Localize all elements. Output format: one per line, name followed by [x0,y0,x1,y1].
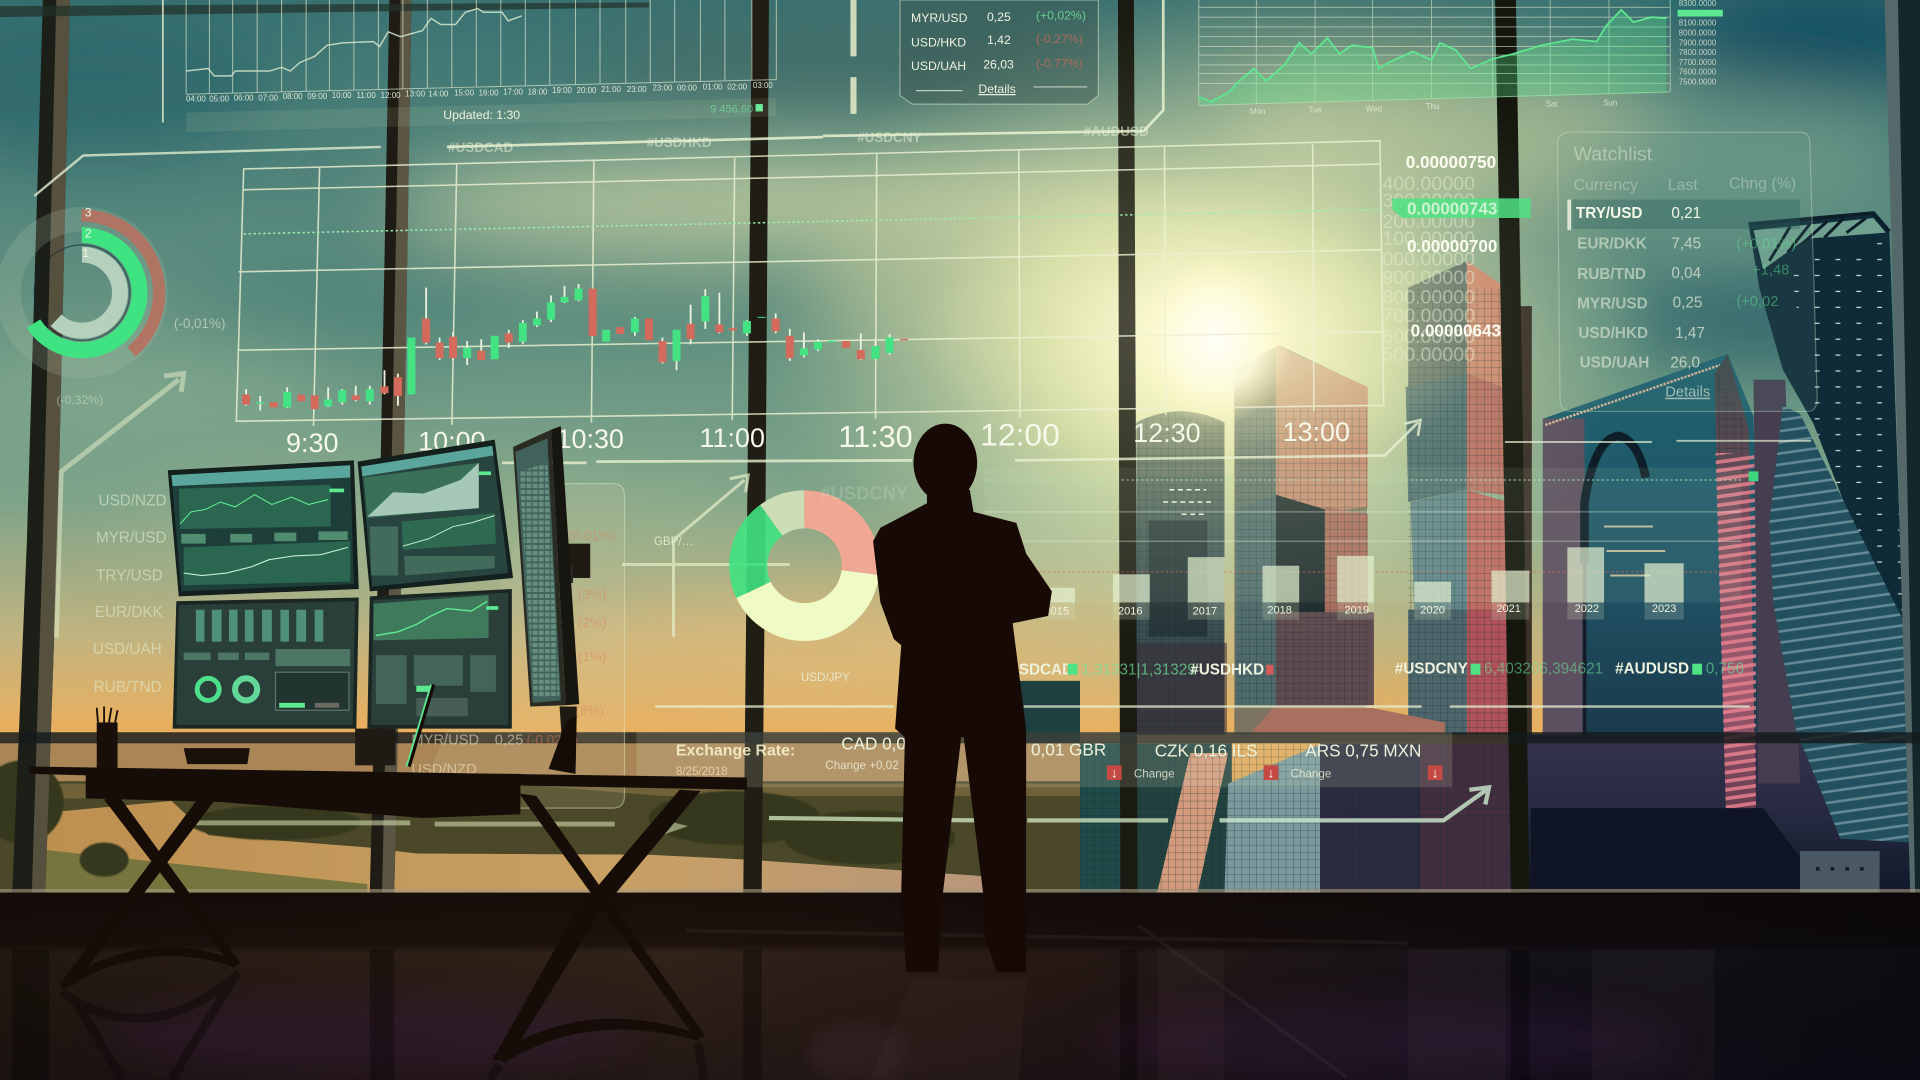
side widgets [370,527,495,576]
year labels: 2023 [1652,603,1676,615]
highlight marker [1567,200,1571,230]
mini donut one [197,678,219,700]
monitor: top right [358,440,513,591]
centre donut chart [748,509,861,622]
table rows [1576,205,1705,371]
top centre rates panel: USD/UAH [911,59,966,73]
monitor: bottom right [367,589,512,729]
time axis labels: 07:00 [258,93,279,102]
time axis labels: 09:00 [307,92,328,101]
main candlestick chart [236,141,1531,463]
ring 3 [5,216,159,370]
day labels: Sun [1603,98,1617,107]
watchlist panel [1558,132,1817,411]
day labels: Mon [1250,107,1265,116]
details link: Details [1665,385,1710,401]
monitor: top left [168,460,359,596]
lower ticker: #USDHKD [1190,662,1264,679]
pink striped edge [1714,354,1756,833]
y axis labels: 7700.0000 [1679,58,1717,67]
day labels: Thu [1426,102,1439,111]
yearly bar chart [984,468,1758,620]
time axis labels: 12:00 [381,91,401,100]
day labels [1250,98,1617,116]
year labels [1044,603,1676,618]
clouds [0,0,1920,710]
day labels: Sat [1545,100,1558,109]
crown ribs [1753,218,1886,269]
right hud lines [1505,441,1811,442]
panel bracket [447,0,1163,147]
lower ticker: SDCAD [1019,662,1073,679]
exchange rate strip: ↓ [1432,766,1438,781]
basket [184,748,250,764]
top-right area chart [1199,0,1723,116]
strip heading: Exchange Rate: [676,743,795,760]
faint price scale: 900.00000 [1382,267,1475,289]
price labels: 0.00000700 [1407,236,1497,256]
ring percentage: (-0,01%) [174,316,225,331]
time axis labels: 18:00 [528,87,548,96]
donut labels: USD/JPY [801,671,850,684]
table rows: MYR/USD [1577,296,1648,313]
exchange rate strip: ↓ [1268,766,1274,781]
lower ticker: #AUDUSD [1615,660,1689,677]
header bar [361,446,493,476]
time axis labels: 02:00 [727,82,748,91]
time axis labels: 01:00 [703,82,723,91]
time axis labels: 05:00 [209,95,230,104]
strip values: 0,01 GBR [1031,740,1106,760]
tag [479,471,491,475]
desk reflection [61,973,704,1080]
cream segment [748,509,861,622]
lens flare [808,1022,906,1080]
low building behind person [1019,681,1080,743]
strip values: CAD 0,0 [841,733,906,753]
donut labels [654,535,850,684]
table header: Last [1668,177,1698,194]
highlight row [1572,200,1800,229]
evolution tower body [1749,213,1903,620]
translucent side panel: (1%) [578,649,606,664]
status strip [186,98,776,132]
chart gridlines [984,512,1741,541]
area series [1199,10,1667,105]
top centre rates panel: Details [978,82,1016,96]
red dotted level [984,571,1741,573]
exchange rate strip: ↓ [1111,766,1118,781]
table rows: 26,0 [1670,354,1700,371]
sun haze behind towers [759,0,1665,716]
chart grid [236,141,1384,426]
decorative corner line [34,147,381,196]
price labels: 0.00000643 [1411,321,1501,341]
currency list left: USD/UAH [93,641,162,658]
table header: Currency [1573,177,1638,194]
time axis labels: 06:00 [234,93,254,102]
y axis labels: 8100.0000 [1679,19,1717,28]
green candles [260,289,890,407]
time axis labels: 08:00 [283,92,303,101]
change values: +1,48 [1752,262,1789,278]
table header: Chng (%) [1729,176,1796,193]
time axis: 10:30 [557,424,624,454]
lower chart [402,513,496,550]
widgets [184,649,350,666]
landscape: horizon, trees and river [0,742,1127,901]
translucent side panel: (0,01%) [568,528,615,543]
dashed level [244,209,1384,234]
lower facades [1080,743,1518,893]
translucent side panel: (2%) [578,615,606,630]
area line [1199,10,1667,102]
upper chart [179,485,331,529]
vertical slider [851,0,856,114]
button [279,703,305,708]
change values [1736,237,1796,310]
price line [186,9,522,76]
time axis: 11:30 [838,420,913,454]
mini donut two [235,678,257,700]
ring track [34,245,130,340]
change labels: Change +0,02 [825,759,899,772]
y axis labels: 8000.0000 [1679,29,1717,38]
year labels: 2015 [1044,606,1069,618]
arch building [1543,354,1763,735]
lower growth arrow [1220,787,1489,820]
strip value: 9 456,60 [710,104,753,116]
top ticker: #USDCAD [448,140,513,155]
grey segment [748,509,861,622]
area chart [364,463,479,518]
table rows: USD/HKD [1578,325,1648,342]
time axis labels: 11:00 [356,91,376,100]
ticker rule [655,706,1750,708]
year labels: 2016 [1118,606,1142,618]
currency list left: EUR/DKK [95,604,164,621]
faint price scale: 500.00000 [1382,344,1475,366]
year labels: 2017 [1193,606,1217,618]
faint price scale [1382,173,1475,366]
table rows: 7,45 [1671,236,1701,253]
ring 2 [24,235,140,350]
top centre rates panel [900,0,1098,104]
translucent side panel: (-0,02%) [527,732,578,747]
button alt [315,703,339,708]
time axis labels: 16:00 [479,89,499,98]
strip values: CZK 0,16 ILS [1155,741,1258,761]
side panel rows: USD/NZD [411,762,477,778]
faint price scale: 700.00000 [1382,305,1475,327]
time axis labels: 19:00 [552,86,573,95]
top centre rates panel: 0,25 [987,10,1011,24]
currency list left: MYR/USD [96,529,167,546]
faint price scale: 600.00000 [1382,326,1475,348]
y axis labels [1679,0,1717,86]
lower left rule and arrow [196,820,680,835]
time axis: 9:30 [286,428,338,458]
price labels: 0.00000750 [1406,152,1496,172]
overexposure on mullions [796,12,1629,649]
lower centre rule [769,818,1168,820]
translucent side panel: (8%) [576,703,604,718]
time axis labels: 17:00 [503,87,524,96]
currency list left: TRY/USD [96,567,163,584]
time axis labels: 10:00 [332,91,352,100]
side panel rows: 0,25 [495,732,523,748]
sun glare over towers [912,165,1500,484]
chart [373,595,489,640]
table rows: 0,04 [1671,265,1702,282]
year labels: 2020 [1420,604,1445,616]
torso and legs [873,490,1052,972]
table rows: RUB/TND [1577,266,1646,283]
table rows: EUR/DKK [1577,236,1647,253]
time axis labels: 00:00 [677,84,697,93]
day labels: Tue [1308,106,1322,115]
city: right side towers [1518,213,1920,894]
strip marker [756,104,763,111]
strip values: ARS 0,75 MXN [1305,741,1421,761]
ring numbers [82,206,92,260]
table rows: TRY/USD [1576,205,1642,222]
current price tag [1392,198,1531,218]
time axis: 13:00 [1283,417,1350,447]
chart marker [1749,471,1758,481]
faint price scale: 400.00000 [1382,173,1475,195]
currency list left: RUB/TND [94,679,162,696]
top centre rates panel: (-0,77%) [1036,56,1083,70]
lower ticker: #USDCNY [1395,660,1468,677]
table rows: 1,47 [1675,325,1705,342]
change values: (+0,02 [1736,294,1778,310]
ring background [9,219,156,366]
year labels: 2022 [1575,603,1599,615]
left ring chart [5,206,159,370]
exchange rate strip [637,732,1452,787]
y axis labels: 7800.0000 [1679,48,1717,57]
ring numbers: 2 [85,227,92,241]
year labels: 2021 [1496,603,1521,615]
year labels: 2018 [1267,604,1292,616]
lower ticker: 0,756 [1706,660,1744,677]
time axis: 12:30 [1133,418,1201,448]
change labels [825,759,1331,781]
red down arrows [1107,765,1442,780]
day labels: Wed [1366,104,1382,113]
person reflection [869,980,1026,1080]
time axis [286,417,1350,458]
time axis labels: 20:00 [577,86,597,95]
top centre rates panel: MYR/USD [911,11,968,25]
top ticker: #AUDUSD [1084,124,1149,139]
ring numbers: 3 [85,206,92,220]
time axis labels: 23:00 [627,85,647,94]
faint currency mark: #USDCNY [820,483,908,504]
table header [1573,176,1796,194]
top ticker [448,124,1149,155]
time axis labels: 04:00 [186,95,206,104]
tag [486,606,498,610]
lower ticker: 1,31331|1,31329 [1081,662,1196,679]
lower chart [184,541,350,585]
bars [196,610,323,642]
time axis labels: 23:00 [653,84,673,93]
red candles [246,289,904,409]
y axis labels: 7600.0000 [1679,68,1717,77]
desk [29,767,747,1063]
left growth arrow [56,373,184,638]
time axis: 10:00 [418,427,486,457]
top ticker: #USDCNY [857,130,921,145]
monitor: bottom left [173,598,359,729]
sun core [1136,255,1293,426]
city: central towers [1019,261,1532,893]
bars [1040,547,1684,602]
currency list left: USD/NZD [99,493,167,510]
side panel rows: MYR/USD [411,732,479,748]
table rows: 0,25 [1673,294,1702,311]
y axis labels: 7500.0000 [1679,77,1717,86]
top centre rates panel: (+0,02%) [1036,9,1086,23]
time axis labels: 15:00 [454,89,475,98]
low dark skyline [1531,808,1800,893]
podium building [1800,851,1880,893]
time axis labels: 14:00 [428,90,449,99]
widget row [181,531,348,544]
time axis: 12:00 [980,417,1060,453]
year label tabs [1040,602,1684,620]
centre arrow [622,475,790,637]
tag [329,489,344,492]
time axis labels: 21:00 [601,85,622,94]
translucent side panel: (3%) [578,587,606,602]
monitor stands [355,544,590,774]
time axis labels: 13:00 [405,90,426,99]
table rows: 0,21 [1671,205,1701,222]
top centre rates panel: 1,42 [987,33,1011,47]
year labels: 2019 [1344,604,1369,616]
button [416,686,430,692]
price labels: 0.00000743 [1407,198,1497,218]
change values: (+0,01%) [1736,237,1796,253]
top ticker: #USDHKD [647,135,712,150]
top centre rates panel: USD/HKD [911,36,966,50]
ring numbers: 1 [82,246,89,260]
y axis labels: 7900.0000 [1679,38,1717,47]
top-left line chart panel [163,0,776,132]
time axis labels: 03:00 [753,81,773,90]
axis underline [502,420,1420,463]
dusk base [1518,735,1920,894]
small bars [416,698,468,716]
twisted tower [1769,405,1911,842]
time axis labels [186,81,773,104]
strip date: 8/25/2018 [676,765,728,778]
plum block [1753,380,1800,784]
change labels: Change [1134,768,1175,781]
table rows: USD/UAH [1580,354,1649,371]
round tower [1136,411,1227,735]
lower ticker [1019,660,1744,679]
current value tag [1678,10,1723,17]
faint price scale: 800.00000 [1382,287,1475,309]
faint price scale: 100.00000 [1382,228,1475,250]
pencil cup [97,707,118,769]
panel title: Watchlist [1573,143,1653,165]
peach segment [748,509,861,622]
side panel rows [411,732,523,778]
stepped tower B [1234,345,1374,735]
strip values [841,733,1421,761]
dotted levels [984,479,1741,481]
form box [276,672,349,710]
lower ticker: 6,403206,394621 [1484,660,1603,677]
person silhouette [873,424,1052,972]
faint price scale: 000.00000 [1382,249,1475,271]
laptop [407,684,433,767]
price labels [1406,152,1501,341]
top centre rates panel: 26,03 [983,58,1014,72]
podium roofs [1249,708,1445,735]
translucent side panel [411,484,624,808]
monitor: vertical [513,426,579,707]
head [913,424,977,502]
floor [0,893,1920,1080]
ring 1 [44,255,120,331]
time axis: 11:00 [700,423,765,453]
updated time: Updated: 1:30 [443,108,520,122]
header bar [171,465,350,486]
widgets [376,655,496,704]
faint price scale: 200.00000 [1382,211,1475,233]
faint price scale: 300.00000 [1382,190,1475,212]
stepped tower C [1406,261,1532,735]
currency list left [93,493,167,696]
candle wicks [246,284,890,411]
donut labels: GBP/… [654,535,693,548]
secondary percentage: (-0,32%) [56,393,103,407]
top centre rates panel: (-0,27%) [1036,32,1083,46]
change labels: Change [1291,768,1331,781]
